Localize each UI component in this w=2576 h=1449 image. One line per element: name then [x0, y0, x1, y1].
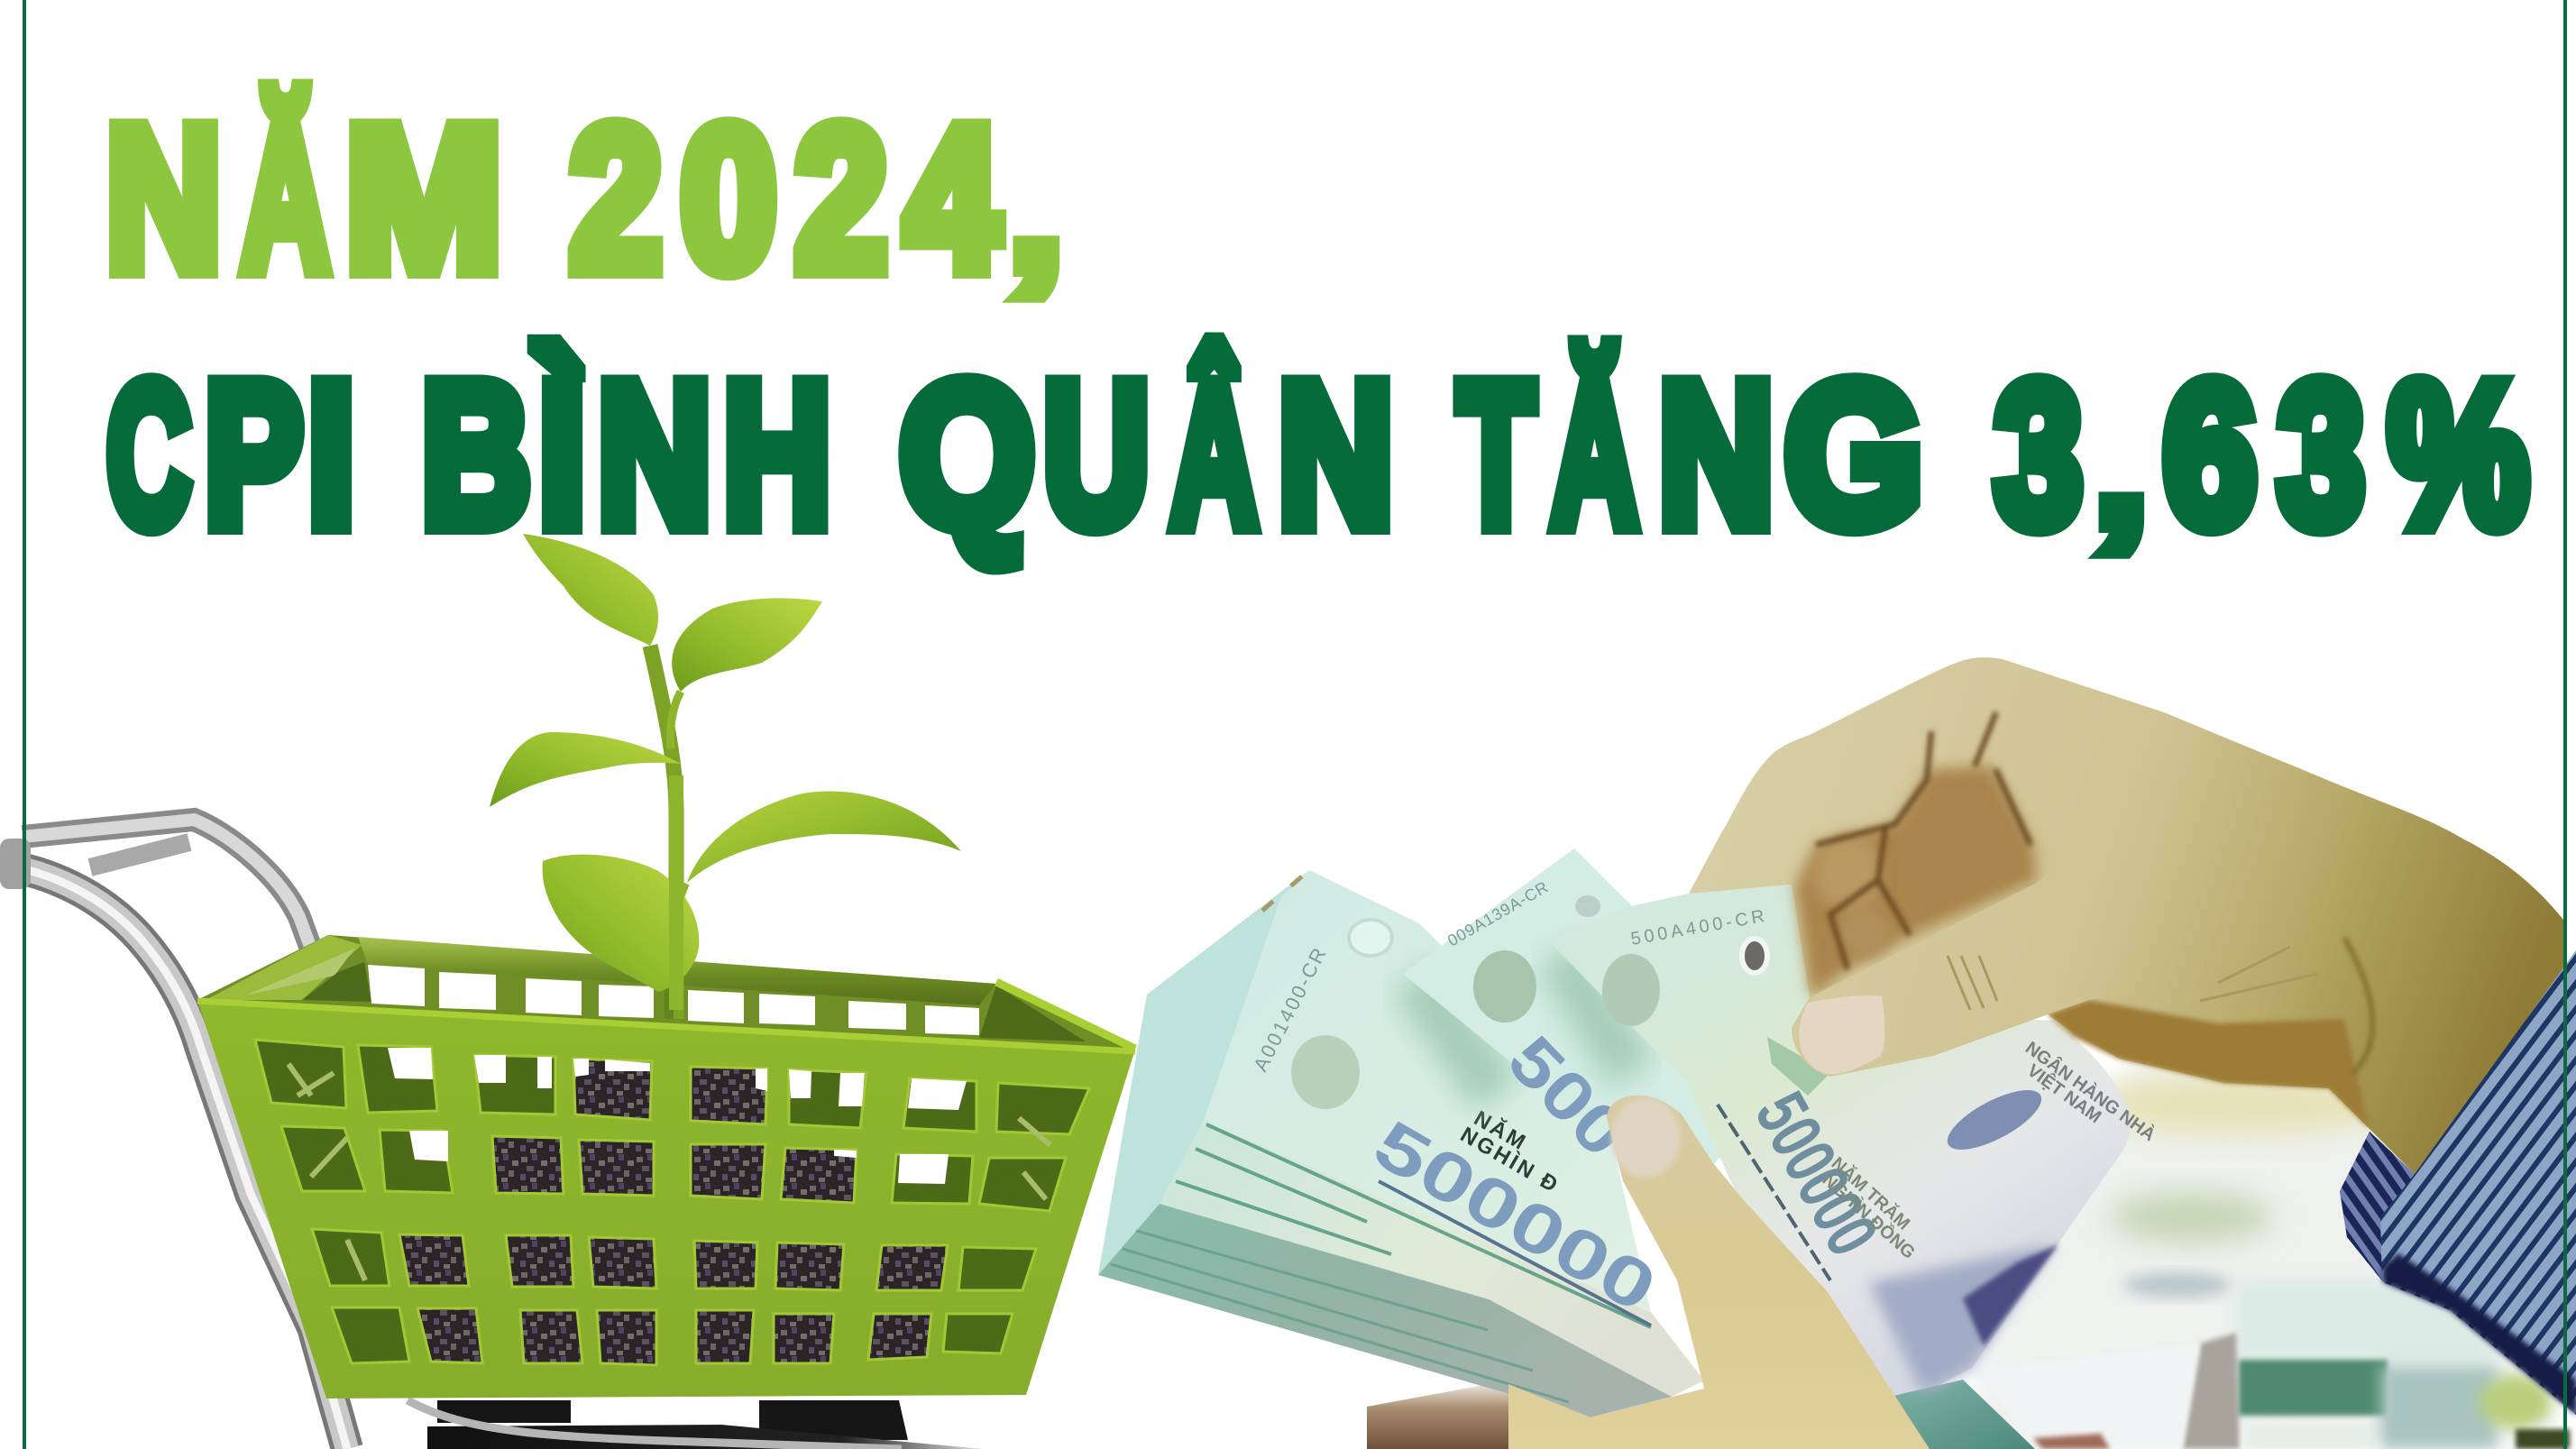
title line 2: CPI BÌNH QUÂN TĂNG 3,63%: % [2388, 340, 2528, 568]
note edge [1893, 1380, 2035, 1449]
wrist shadow [2344, 938, 2372, 1073]
third folded banknote: NĂM TRĂM [1828, 1153, 1914, 1234]
leaf left [490, 732, 681, 807]
title line 2: CPI BÌNH QUÂN TĂNG 3,63%: Q [900, 341, 1034, 568]
title line 2: CPI BÌNH QUÂN TĂNG 3,63%: N [1279, 341, 1393, 568]
leaf right [687, 792, 961, 883]
third folded banknote: NGHÌN ĐỒNG [1819, 1169, 1920, 1263]
third folded banknote: 500000 [1740, 1079, 1893, 1268]
banknote stack: NGHÌN Đ [1456, 1122, 1564, 1198]
denomination 500000: 500000 [1361, 1105, 1669, 1327]
illustration: upper hand [1689, 657, 2563, 1174]
seedling [490, 534, 961, 1019]
third folded banknote: VIỆT NAM [2023, 1059, 2105, 1127]
title line 2: CPI BÌNH QUÂN TĂNG 3,63%: 3 [2278, 340, 2364, 568]
illustration: banknotes [1098, 848, 2159, 1449]
finger pads [1813, 835, 1882, 911]
engraving [1869, 1244, 2053, 1395]
basket front frame [197, 1000, 1135, 1399]
third folded banknote [1549, 885, 2159, 1449]
title line 2: CPI BÌNH QUÂN TĂNG 3,63%: N [598, 340, 711, 568]
palm shadow band [2048, 1000, 2370, 1129]
cart handle [0, 820, 347, 1449]
title line 2: CPI BÌNH QUÂN TĂNG 3,63%: G [1785, 340, 1922, 568]
second banknote: 500 [1493, 1022, 1642, 1172]
title line 2: CPI BÌNH QUÂN TĂNG 3,63%: P [205, 341, 303, 568]
basket rim highlight [197, 1001, 1135, 1051]
leaf top [523, 534, 658, 646]
curled fingers shadow [1795, 766, 2037, 997]
banknote stack [1098, 870, 1704, 1417]
title line 1: NĂM 2024,: , [1009, 117, 1063, 304]
third folded banknote: 500A400-CR [1629, 906, 1766, 949]
emblem on top note [1291, 1035, 1360, 1109]
knuckle wrinkles [1948, 947, 2317, 1010]
thumb nail [1799, 995, 1885, 1074]
title line 2: CPI BÌNH QUÂN TĂNG 3,63%: I [307, 342, 355, 569]
finger creases [1816, 712, 2031, 969]
title line 2: CPI BÌNH QUÂN TĂNG 3,63%: , [2095, 375, 2148, 561]
thumb [1792, 851, 2200, 1077]
sleeve shadow [2383, 1253, 2576, 1415]
second banknote [1403, 848, 1785, 1217]
serial number: A001400-CR [1249, 944, 1331, 1075]
cart back wall [197, 935, 1135, 1050]
title line 1: NĂM 2024,: 2 [570, 85, 662, 312]
illustration: shopping cart with seedling [0, 534, 1135, 1449]
illustration: brown box behind palm [1367, 1380, 1515, 1449]
title line 2: CPI BÌNH QUÂN TĂNG 3,63%: Â [1170, 342, 1258, 569]
title line 1: NĂM 2024,: M [345, 85, 502, 313]
lower thumb nail [1611, 1098, 1680, 1178]
left frame line [23, 0, 26, 1449]
stem [650, 646, 676, 1019]
title line 1: NĂM 2024, [106, 85, 1063, 313]
title line 1: NĂM 2024,: N [106, 85, 221, 312]
second banknote: 009A139A-CR [1444, 878, 1551, 949]
title line 1: NĂM 2024,: Ă [242, 85, 329, 313]
title line 1: NĂM 2024,: 4 [905, 86, 999, 313]
hand silhouette [1689, 657, 2563, 1174]
title line 2: CPI BÌNH QUÂN TĂNG 3,63%: N [1659, 341, 1774, 568]
illustration: striped sleeve [2340, 950, 2576, 1415]
title line 2: CPI BÌNH QUÂN TĂNG 3,63%: T [1458, 341, 1535, 568]
cuff [2340, 1132, 2415, 1280]
words on note: NĂM [1470, 1105, 1532, 1156]
illustration: lower hand thumb [1508, 1096, 1930, 1449]
basket mesh cells [255, 1040, 1089, 1365]
blurred background photo [1966, 1059, 2570, 1449]
title line 2: CPI BÌNH QUÂN TĂNG 3,63%: Ă [1551, 342, 1638, 569]
title line 2: CPI BÌNH QUÂN TĂNG 3,63%: Ì [535, 342, 586, 569]
right frame line [2563, 0, 2567, 1449]
title line 2: CPI BÌNH QUÂN TĂNG 3,63%: B [422, 342, 530, 569]
cart wheels and base [408, 1400, 983, 1449]
leaf upper right [672, 598, 822, 692]
title line 2: CPI BÌNH QUÂN TĂNG 3,63%: C [106, 340, 191, 568]
third folded banknote: NGÂN HÀNG NHÀ [2021, 1037, 2159, 1145]
title line 2: CPI BÌNH QUÂN TĂNG 3,63%: 6 [2163, 341, 2257, 568]
title line 1: NĂM 2024,: 2 [795, 85, 887, 312]
title [106, 85, 2528, 569]
title line 1: NĂM 2024,: 0 [681, 85, 776, 313]
title line 2: CPI BÌNH QUÂN TĂNG 3,63%: 3 [1995, 340, 2082, 568]
title line 2: CPI BÌNH QUÂN TĂNG 3,63%: U [1043, 341, 1150, 568]
title line 2: CPI BÌNH QUÂN TĂNG 3,63% [106, 340, 2528, 569]
title line 2: CPI BÌNH QUÂN TĂNG 3,63%: H [723, 341, 831, 568]
leaf bottom [543, 855, 699, 992]
